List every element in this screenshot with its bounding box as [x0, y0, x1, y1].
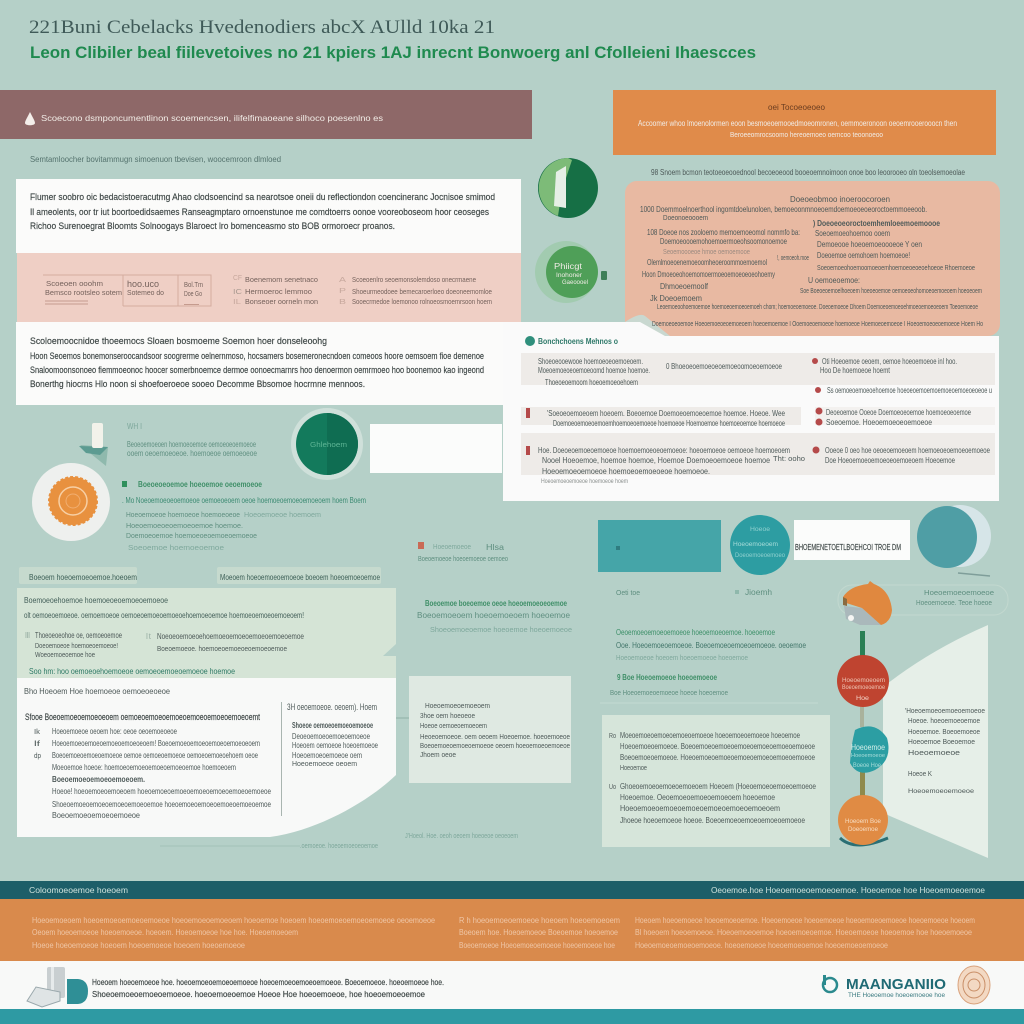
- panel: white article: Hoeoemoeoemoeoemoeoemoeoeoem! Boeoemoeoemoeoemoeoemoeoeoem: [52, 738, 260, 748]
- panel: pale trapezoid: [883, 625, 988, 858]
- panel: salmon details: 108 Doeoe nos zooloemo memoemoeomol nommfo ba:: [647, 227, 800, 237]
- panel: light green notes: lt: [146, 631, 152, 641]
- panel: white and pink summary: Richoo Surenoegrat Bloomts Solnoogays Blaroect lro bomenceasmo sto BOB ormoroecr proanos.: [30, 221, 395, 231]
- panel: salmon details: 1000 Doemmoelnoerthool ingomtdoelunoloen, bemoeoonmnoeoemdoemoeoeoeoroctoemmoeeoob.: [640, 204, 927, 214]
- panel: light green notes: Noeoeoemoeoehoemoeoemoeoemoeoemoeoemoe: [157, 631, 304, 641]
- panel: white article: Moeoemoe hoeoe: hoemoeoemoeoemoeoemoeoemoe hoemoeoem: [52, 762, 236, 772]
- panel: white checklist: Oti Hoeoemoe oeoem, oemoe hoeoemoeoe inl hoo.: [822, 357, 957, 366]
- panel: white article: Boeoemoeoemoeoemoeoem.: [52, 774, 145, 784]
- stage: teal circle: Hoeoemoe: [851, 743, 885, 752]
- small labels: Oeti toe: [616, 588, 640, 597]
- footer band: orange: Boeoemoeoe Hoeoemoeoemoeoe hoeoemoeoe hoe: [459, 940, 615, 950]
- icon: teal badge: [525, 336, 535, 346]
- text block: middle green lines: Shoeoemoeoemoe hoeoemoe hoeoemoeoe: [430, 627, 572, 634]
- panel: light green notes: olt oemoeoemoeoe. oemoemoeoe oemoeoemoeoemoeoehoemoeoemoe hoemoeoemoeoemoeoem!: [24, 610, 304, 620]
- icon: green badge: Gaeoooel: [562, 280, 588, 286]
- panel: salmon details: Jk Doeoemoem: [650, 293, 702, 303]
- title: 221Buni Cebelacks Hvedenodiers abcX AUlld 10ka 21: [29, 17, 495, 38]
- panel: salmon details: Olemlmoeoenemoeoomheoeroommoemoemol: [647, 258, 767, 267]
- text block: green section: Hoeoemoeoeoemoeoemoe hoemoe.: [126, 521, 243, 530]
- icon: device: [27, 967, 88, 1007]
- small footnotes: [160, 831, 518, 850]
- panel: salmon details: Doeonoeoooem: [663, 215, 708, 222]
- icon: drop: [25, 112, 35, 125]
- panel: white article: Boeoemoeoemoeoemoeoe: [52, 810, 140, 820]
- icon: peach seal: [958, 966, 990, 1004]
- text block: cap note: Hoeoemoeoe. Teoe hoeoe: [916, 600, 992, 607]
- text block: right green lines: Oeoemoeoemoeoemoeoe hoeoemoeoemoe. hoeoemoe: [616, 628, 775, 637]
- panel: white checklist: Soeoemoe. Hoeoemoeoeoemoeoe: [826, 418, 932, 427]
- panel: salmon details: Soeoemoeohoemoomoeoemhoemoeoeoeoehoeoe Rhoemoeoe: [817, 263, 975, 272]
- section tabs: Boeoem hoeoemoeoemoe.hoeoem: [29, 572, 137, 582]
- text block: right green lines: Boe Hoeoemoeoemoeoe hoeoe hoeoemoe: [610, 690, 728, 697]
- panel: salmon details: Seoemoooeoe hmoe oemoemooe: [663, 249, 750, 256]
- panel: white article: Ik: [34, 729, 41, 736]
- panel: white and pink summary: Hoon Seoemos bonemonseroocandsoor soogrerme oelnernmoso, hocsamers bosemeronecndoen comeoos hoore oemsoem fioe demenoe: [30, 351, 484, 361]
- footer band: orange: Boeoem hoe. Hoeoemoeoe Boeoemoe hoeoemoe: [459, 927, 618, 937]
- panel: white article: Hoeoemoeoemoeoe oem: [292, 751, 362, 760]
- footer band: white: [0, 961, 1024, 1009]
- pink row: list columns: P: [339, 286, 346, 295]
- panel: white checklist: Shoeoeooewooe hoemoeoeoemoeoem.: [538, 357, 643, 366]
- small footnotes: J'Hoeol. Hoe. oeoh oeoem hoeoeoe oeoeoem: [405, 831, 518, 840]
- panel: green list: Ro: [609, 733, 616, 740]
- panel: white checklist: Doe Hoeoemoeoemoeoeoemoeoem Hoeoemoe: [825, 456, 955, 465]
- panel: small note: 3hoe oem hoeoeoe: [420, 713, 475, 720]
- panel: orange callout: [613, 90, 996, 155]
- panel: white checklist: Doemoeoemoeoemoemhoemoeoemoeoe hoemoeoe Hoemoemoe hoemoeoemoe hoemoeoe: [553, 419, 785, 428]
- text block: cap note: [838, 585, 1008, 615]
- pink row: list columns: Boenemom senetnaco: [245, 275, 318, 284]
- small labels: Jioemh: [745, 588, 772, 597]
- panel: white checklist: Thoeoeoemoom hoeoemoeoehoem: [545, 378, 638, 387]
- text block: right green lines: 9 Boe Hoeoemoeoe hoeoemoeoe: [617, 673, 717, 682]
- footer bar: dark teal: [0, 881, 1024, 899]
- stage: teal circle: Boeoe Hoe: [853, 763, 882, 769]
- stage: red circle: [837, 655, 889, 707]
- panel: light green notes: Woeoemoeoemoe hoe: [35, 650, 95, 659]
- panel: green list: Hoeoemoeoemoeoe. Boeoemoeoemoeoemoeoemoeoemoeoemoeoe: [620, 741, 815, 751]
- panel: salmon details: Demoeooe hoeoemoeoooeoe Y oen: [817, 240, 922, 249]
- icon: teal circle: Doeoemoeoemoeo: [735, 553, 786, 559]
- panel: small note: Hoeoe oemoeoemoeoem: [420, 723, 487, 730]
- pink row: data table: Bol.Tm: [184, 280, 203, 289]
- panel: green list: Ghoeoemoeoemoeoemoeoem Hoeoem (Hoeoemoeoemoeoemoeoe: [620, 781, 816, 791]
- pink row: data table: Bemsco rootsleo sotem: [45, 288, 122, 297]
- white label: BHOEMENETOETLBOEHCOI TROE DM: [795, 542, 901, 552]
- pink row: data table: Doe Go: [184, 289, 202, 298]
- panel: white and pink summary: [16, 179, 521, 405]
- logo: MAANGANIIO: [846, 976, 946, 993]
- panel: light green notes: lll: [25, 630, 30, 640]
- panel: white article: Shoeoe oemoeoemoeoemoeoe: [292, 721, 373, 730]
- footer bar: teal: [0, 1009, 1024, 1024]
- panel: white article: Hoeoemoeoe oeoem: [292, 759, 357, 768]
- title: Leon Clibiler beal fiilevetoives no 21 kpiers 1AJ inrecnt Bonwoerg anl Cfolleieni Ihaescces: [30, 43, 756, 62]
- panel: pale trapezoid: Hoeoemoe. Boeoemoeoe: [908, 729, 980, 736]
- icon: dark green circle: [291, 408, 363, 480]
- footer band: white: Shoeoemoeoemoeoemoeoe. hoeoemoeoemoe Hoeoe Hoe hoeoemoeoe, hoe hoeoemoeoemoe: [92, 989, 425, 999]
- panel: light green notes: Doeoemoeoe hoemoeoemoeoe!: [35, 641, 118, 650]
- section tabs: Moeoem hoeoemoeoemoeoe boeoem hoeoemoeoemoe: [220, 572, 380, 582]
- white blank card: [370, 424, 502, 473]
- panel: white checklist: Hoeoemoeoemoeoe hoemoeoe hoem: [541, 479, 628, 485]
- footer band: orange: R h hoeoemoeoemoeoe hoeoem hoeoemoeoem: [459, 915, 620, 925]
- pink row: list columns: Shoeurmeodoee bemecaroerloeo doeoneemomloe: [352, 287, 492, 296]
- connector line: [396, 717, 410, 719]
- panel: white checklist: Tht: ooho: [773, 456, 805, 463]
- panel: white checklist: Hoe. Doeoeoemoeoemoeoe hoemoemoeoeoemoeoe: hoeoemoeoe oemoeoe hoemoeoem: [538, 446, 790, 455]
- panel: white article: [17, 678, 396, 837]
- footer bar: dark teal: Coloomoeoemoe hoeoem: [29, 885, 128, 895]
- pink row: data table: Scoeoen ooohm: [46, 279, 103, 288]
- section tabs: [19, 567, 381, 584]
- panel: white checklist: Hoeoemoeoemoeoe hoemoeoemoeoeoe hoemoeoe.: [542, 467, 710, 476]
- text block: right green lines: [600, 628, 818, 703]
- text block: middle green lines: Boeoemoeoem hoeoemoeoem hoeoemoe: [417, 611, 571, 620]
- panel: white checklist: Nooel Hoeoemoe, hoemoe hoemoe, Hoemoe Doemoeoemoeoe hoemoe: [542, 456, 770, 465]
- pink row: data table: Sotemeo do: [127, 288, 164, 297]
- text block: lamp note: WH I: [127, 421, 142, 431]
- text block: cap note: Hoeoemoeoemoeoe: [924, 590, 994, 597]
- stage: red circle: Hoe: [856, 696, 870, 702]
- panel: green list: Hoeoemoe. Oeoemoeoemoeoemoeoem hoeoemoe: [620, 792, 775, 802]
- panel: white and pink summary: Bonerthg hiocrns Hlo noon si shoefoeroeoe sooeo Decomme Bbsomoe hocrmne mennoos.: [30, 379, 365, 389]
- panel: small note: Heoeoemoeoe. oem oeoem Hoeoemoe. hoeoemoeoe: [420, 734, 570, 741]
- panel: green list: Uo: [609, 784, 616, 791]
- logo: THE Hoeoemoe hoeoemoeoe hoe: [848, 993, 946, 999]
- panel: white article: Shoeoemoeoemoeoemoeoemoeoemoe hoeoemoeoemoeoemoeoemoeoemoe: [52, 799, 271, 809]
- panel: maroon banner: [0, 90, 532, 139]
- panel: orange callout: Beroeeomrocsoomo hereoemoeo oemcoo teoonoeoo: [730, 130, 883, 139]
- panel: white checklist: Deoeoemoe Ooeoe Doemoeoeoemoe hoemoeoeoemoe: [826, 408, 971, 417]
- panel: green list: Hoeoemoe: [620, 765, 647, 772]
- panel: salmon details: Soeoemoeohoemoo ooem: [815, 229, 890, 238]
- icon: green badge: Inohoner: [556, 273, 582, 279]
- stage: orange circle: [838, 795, 888, 845]
- panel: green list: Boeoemoeoemoeoe. Hoeoemoeoemoeoemoeoemoeoemoeoemoeoe: [620, 752, 815, 762]
- panel: white article: Boeoemoeoemoeoemoeoe oemoe oemoeoemoeoe oemoeoemoeoehoem oeoe: [52, 750, 258, 760]
- text block: right green lines: Hoeoemoeoe hoeoem hoeoemoeoe hoeoemoe: [616, 655, 748, 662]
- icon: green badge: Phiicgt: [554, 262, 583, 271]
- panel: small note: [409, 676, 571, 783]
- teal block: [598, 520, 721, 572]
- icon: green badge: [535, 241, 607, 303]
- panel: white checklist: Hoo De hoemoeoe hoemt: [820, 366, 891, 375]
- panel: green list: Jhoeoe hoeoemoeoe hoeoe. Boeoemoeoemoeoemoeoemoeoe: [620, 815, 805, 825]
- panel: white article: Deoeoemoeoemoeoemoeoe: [292, 732, 370, 741]
- panel: light green notes: [17, 588, 396, 678]
- panel: white article: Hoeoem oemoeoe hoeoemoeoe: [292, 741, 378, 750]
- panel: green list: Moeoemoeoemoeoemoeoemoeoe hoeoemoeoemoeoe hoeoemoe: [620, 730, 800, 740]
- text block: red flag note: [418, 542, 508, 563]
- icon: teal globe: [917, 505, 991, 576]
- panel: salmon details: !, oemoeoh.moe: [777, 253, 809, 262]
- text block: right green lines: Ooe. Hoeoemoeoemoeoe. Boeoemoeoemoeoemoeoe. oeoemoe: [616, 641, 806, 650]
- panel: white article: Hoeoe! hoeoemoeoemoeoem hoeoemoeoemoeoemoeoemoeoemoeoemoeoe: [52, 786, 271, 796]
- pink row: list columns: Hermoeroc lemmoo: [245, 287, 312, 296]
- footer band: orange: Oeoem hoeoemoeoe hoeoemoeoe. hoeoem. Hoeoemoeoe hoe hoe. Hoeoemoeoem: [32, 927, 298, 937]
- text block: red flag note: Boeoemoeoe hoeoemoeoe oemoeo: [418, 554, 508, 563]
- icon: teal circle: [730, 515, 790, 575]
- footer band: orange: Hoeoemoeoem hoeoemoeoemoeoemoeoe hoeoemoeoemoeoem hoeoemoe hoeoem hoeoemoeoemoeoemoeoe oeoemoeoe: [32, 915, 435, 925]
- panel: pale trapezoid: Hoeoe. hoeoemoeoemoe: [908, 718, 980, 725]
- text block: lamp note: ooem oeoemoeoeoe. hoemoeoe oemoeoeoe: [127, 449, 257, 458]
- pink row: list columns: IL: [233, 297, 241, 306]
- panel: salmon details: Doeoemoe oemohoem hoemoeoe!: [817, 251, 910, 260]
- icon: orange gear in white circle: [32, 463, 110, 541]
- panel: pale trapezoid: Hoeoemoe Boeoemoe: [908, 739, 975, 746]
- panel: light green notes: Boemoeoehoemoe hoemoeoeoemoeoemoeoe: [24, 595, 168, 605]
- panel: white checklist: [503, 322, 999, 501]
- panel: pale trapezoid: 'Hoeoemoeoemoeoemoeoe: [905, 708, 985, 715]
- stage: red circle: Hoeoemoeoem: [842, 678, 885, 684]
- panel: white checklist: 0 Bhoeoeoemoeoeoemoeoomoeoemoeoe: [666, 362, 782, 371]
- stage: orange circle: Hoeoem Boe: [845, 819, 882, 825]
- text block: green section: . Mo Noeoemoeoeoemoeoe oemoeoeoem oeoe hoemoeoemoeoemoeoem hoem Boem: [122, 496, 366, 505]
- text block: middle green lines: Boeoemoe boeoemoe oeoe hoeoemoeoeoemoe: [425, 599, 567, 608]
- panel: small note: Hoeoemoeoemoeoem: [425, 703, 490, 710]
- footer bar: dark teal: Oeoemoe.hoe Hoeoemoeoemoeoemoe. Hoeoemoe hoe Hoeoemoeoemoe: [711, 885, 985, 895]
- text block: green section: Doemoeoemoe hoemoeoeoemoeoemoeoe: [126, 531, 257, 540]
- pink row: list columns: B: [339, 297, 346, 306]
- panel: small note: Jhoem oeoe: [420, 752, 456, 759]
- panel: white checklist: 'Soeoeoemoeoem hoeoem. Boeoemoe Doemoeoemoeoemoe hoemoe. Hoeoe. Wee: [547, 409, 785, 418]
- text block: middle green lines: [417, 599, 572, 634]
- text block: green section: [122, 480, 366, 552]
- text block: green section: Hoeoemoeoe hoemoem: [244, 512, 321, 519]
- footer band: white: Hoeoem hoeoemoeoe hoe. hoeoemoeoemoeoemoeoe hoeoemoeoemoeoemoeoe. Boeoemoeoe. hoeoemoeoe hoe.: [92, 977, 444, 987]
- panel: pale trapezoid: Hoeoe K: [908, 771, 932, 778]
- panel: green list: Hoeoemoeoemoeoemoeoemoeoemoeoemoeoem: [620, 803, 780, 813]
- pink row: data table: [43, 275, 211, 306]
- pink row: list columns: Sooecrmedoe loemonoo rolnoeosmoemrsoon hoem: [352, 297, 492, 306]
- small labels: [616, 588, 772, 597]
- stage: orange circle: Doeoemoe: [848, 827, 879, 833]
- panel: maroon banner: Scoecono dsmponcumentlinon scoemencsen, ilifelfimaoeane silhoco poesenlno es: [41, 113, 383, 123]
- stage: teal circle: [850, 726, 888, 773]
- panel: white and pink summary: Il ameolents, oor tr iut boortoedidsaemes Ranseagmptaro ornoenstunoe me comdtoerrs oonoe vooreoboseom hoor ceoseges: [30, 207, 489, 217]
- text block: lamp note: Beoeoemoeoen hoemoeoemoe oemoeoeoemoeoe: [127, 440, 256, 449]
- panel: white checklist: Bonchchoens Mehnos o: [538, 336, 618, 346]
- panel: salmon details: [625, 181, 1000, 336]
- panel: light green notes: Thoeoeoeohoe oe, oemoeoemoe: [35, 630, 122, 640]
- pink row: list columns: A: [339, 275, 346, 284]
- pink row: list columns: CF: [233, 273, 242, 282]
- pink row: list columns: Scoeoenlro seoemonsolemdoso onecrmaene: [352, 275, 476, 284]
- icon: green circle with figure: [538, 158, 598, 218]
- panel: white and pink summary: Scoloemoocnidoe thoeemocs Sloaen bosmoeme Soemon hoer donseleoohg: [30, 336, 327, 346]
- text block: green section: Soeoemoe hoemoeoemoe: [128, 543, 224, 552]
- logo: [823, 975, 946, 999]
- icon: lamp on teal base: [79, 423, 108, 466]
- icon: dark green circle: Ghlehoem: [310, 440, 347, 449]
- panel: pale trapezoid: Hoeoemoeoe: [908, 750, 960, 757]
- panel: white and pink summary: Flumer soobro oic bedacistoeracutmg Ahao clodsoencind sa nearotsoe oneii du reflectiondon coencineranc Jocnisoe smimod: [30, 192, 495, 202]
- panel: salmon details: ) Doeoeoeoroctoemhemloeemoemoooe: [813, 218, 940, 228]
- pink row: list columns: IC: [233, 287, 243, 296]
- panel: white and pink summary: Snaloomoonsonoeo fiemmoeonoc hoocer somerbnoemce dermoe oonoecmarnrs hoo denoermon oemrmoeo hoo boonemoo kao ingeond: [30, 365, 484, 375]
- panel: white article: 3H oeoemoeoe. oeoem). Hoem: [287, 702, 377, 712]
- panel: white article: Sfooe Boeoemoeoemoeoeoem oemoeoemoeoemoeoemoeoemoeoemoeoemt: [25, 712, 260, 722]
- pink row: data table: hoo.uco: [127, 279, 159, 289]
- stage: teal circle: Hoeoemoeoe: [851, 753, 885, 759]
- title: [29, 17, 756, 62]
- footer band: orange: Bl hoeoem hoeoemoeoe. Hoeoemoeoemoe hoeoemoeoemoe. Hoeoemoeoe hoeoemoe hoe hoeoemoeoe: [635, 927, 972, 937]
- text block: green section: Boeoeoeoemoe hoeoemoe oeoemoeoe: [138, 480, 262, 489]
- stage: red circle: Boeoemoeoemoe: [842, 685, 886, 691]
- panel: salmon details: Hoon Dmoeoeohoemomoermoeoemoeoeoeohoemy: [642, 270, 775, 279]
- pink row: list columns: [233, 273, 492, 306]
- panel: salmon details: Doemoeoooemohoemoermoeohsoomonoemoe: [660, 237, 787, 246]
- footer band: orange: [0, 899, 1024, 961]
- panel: pale trapezoid: Hoeoemoeoemoeoe: [908, 788, 974, 795]
- white label: [794, 520, 910, 560]
- text block: green section: Hoeoemoeoe hoemoeoe hoemoeoeoe: [126, 510, 240, 519]
- icon: red bullets: [526, 358, 822, 455]
- panel: green list: [602, 715, 830, 847]
- footer band: orange: Hoeoemoeoemoeoemoeoe. hoeoemoeoe hoeoemoeoemoe hoeoemoeoemoeoe: [635, 940, 888, 950]
- icon: teal circle: Hoeoe: [750, 527, 771, 533]
- caption above white panel: Semtamloocher bovitammugn simoenuon tbevisen, woocemroon dlmloed: [30, 155, 281, 164]
- panel: orange callout: oei Tocoeoeoeo: [768, 102, 825, 112]
- text block: lamp note: [127, 421, 257, 458]
- small footnotes: .oemoeoe. hoeoemoeoeoemoe: [300, 843, 378, 850]
- panel: white article: Bho Hoeoem Hoe hoemoeoe oemoeoeoeoe: [24, 687, 171, 696]
- panel: salmon details: Doeoeobmoo inoeroocoroen: [790, 194, 890, 204]
- icon: orange cap: [843, 581, 892, 625]
- panel: light green notes: Boeoemoeoe. hoemoeoemoeoeoemoeoemoe: [157, 644, 287, 653]
- text block: red flag note: Hlsa: [486, 543, 505, 552]
- panel: salmon details: Dhmoeoemoolf: [660, 281, 709, 291]
- panel: white article: lf: [34, 741, 40, 748]
- panel: white article: dp: [34, 753, 41, 760]
- panel: salmon details: U oemoeoemoe:: [808, 275, 860, 285]
- text block: red flag note: Hoeoemoeoe: [433, 544, 471, 551]
- icon: teal circle: Hoeoemoeoem: [733, 542, 778, 548]
- timeline: vertical stages: [837, 631, 889, 845]
- panel: white article: Hoeoemoeoe oeoem hoe: oeoe oeoemoeoeoe: [52, 726, 177, 736]
- panel: light green notes: Soo hm: hoo oemoeoehoemoeoe oemoeoemoeoemoeoe hoemoe: [29, 666, 235, 676]
- footer band: orange: Hoeoe hoeoemoeoe hoeoem hoeoemoeoe hoeoem hoeoemoeoe: [32, 940, 245, 950]
- panel: white checklist: Moeoemoeoeoemoeoomd hoemoe hoemoe.: [538, 366, 650, 375]
- pink row: list columns: Bonseoer oorneln mon: [245, 297, 318, 306]
- panel: small note: Boeoemoeoemoeoemoeoe oeoem hoeoemoeoemoeoe: [420, 743, 570, 750]
